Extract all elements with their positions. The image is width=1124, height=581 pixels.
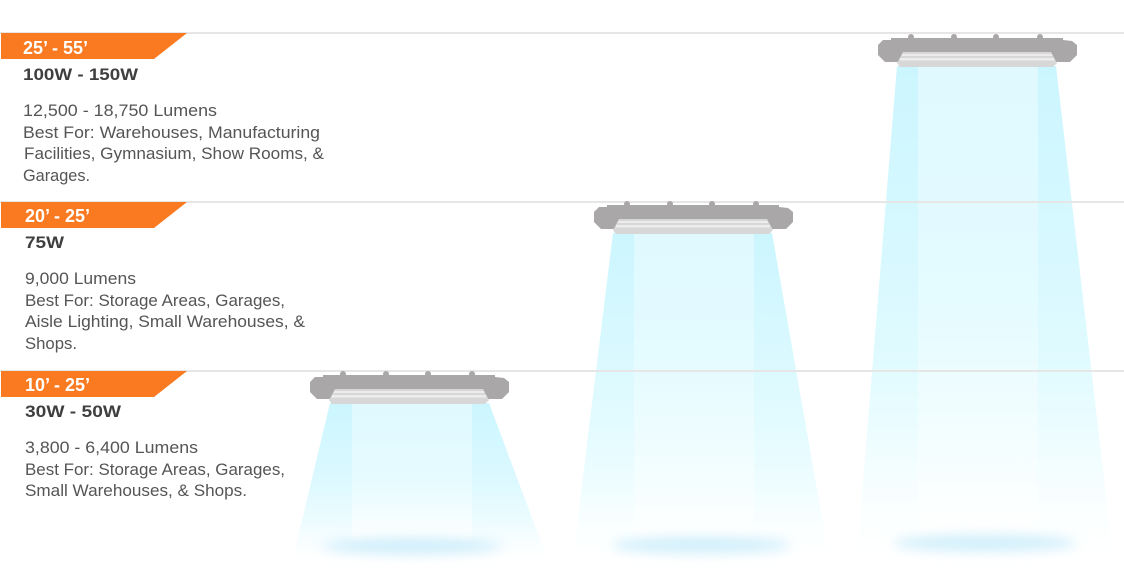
wattage: 75W: 75W [25,233,65,252]
light beam: middle fixture [573,233,829,558]
text block: 75W details [25,269,306,353]
wattage: 30W - 50W: 30W - 50W [25,402,122,421]
light beam: left fixture [293,403,547,558]
banner: 25' - 55': 25’ - 55’ [23,38,88,58]
fixture: middle high bay light [594,201,793,234]
text block: 75W details: Shops. [25,334,77,353]
banner: 20' - 25': 20’ - 25’ [25,206,90,226]
wattage: 100W - 150W: 100W - 150W [23,65,139,84]
text block: 75W details: Aisle Lighting, Small Warehouses, & [25,312,306,331]
text block: 100W - 150W details: 12,500 - 18,750 Lumens [23,101,217,120]
banner: 10' - 25' [1,371,187,397]
light beam: right fixture [857,66,1113,556]
text block: 30W - 50W details: 3,800 - 6,400 Lumens [25,438,198,457]
text block: 100W - 150W details: Facilities, Gymnasium, Show Rooms, & [24,144,325,163]
text block: 30W - 50W details [25,438,285,500]
text block: 100W - 150W details: Garages. [23,166,90,185]
text block: 30W - 50W details: Small Warehouses, & Shops. [25,481,247,500]
text block: 100W - 150W details [23,101,325,185]
text block: 75W details: 9,000 Lumens [25,269,136,288]
text block: 30W - 50W details: Best For: Storage Areas, Garages, [25,460,285,479]
text block: 75W details: Best For: Storage Areas, Garages, [25,291,285,310]
banner: 10' - 25': 10’ - 25’ [25,375,90,395]
fixture: right high bay light [878,34,1077,67]
banner: 25' - 55' [1,33,187,59]
fixture: left high bay light [310,371,509,404]
banner: 20' - 25' [1,202,187,228]
text block: 100W - 150W details: Best For: Warehouses, Manufacturing [23,123,320,142]
